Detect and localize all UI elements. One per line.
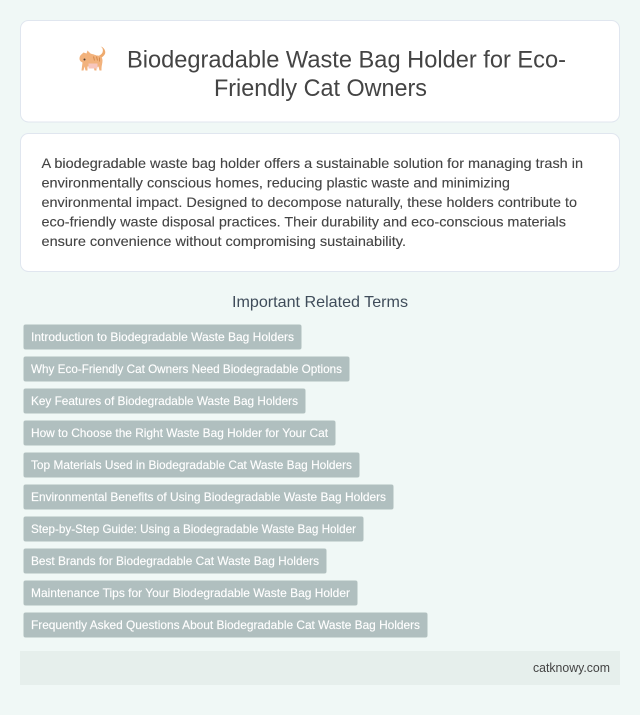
title text: Biodegradable Waste Bag Holder for Eco- <box>127 46 566 74</box>
description text: A biodegradable waste bag holder offers a sustainable solution for managing trash in <box>42 155 583 171</box>
title text <box>127 46 566 102</box>
icon: cat <box>80 46 105 70</box>
tag 1: Introduction to Biodegradable Waste Bag Holders <box>31 330 294 344</box>
tag 6 <box>24 484 394 510</box>
tag 8 <box>24 548 326 574</box>
tag 8: Best Brands for Biodegradable Cat Waste Bag Holders <box>31 554 319 568</box>
title text: Friendly Cat Owners <box>214 75 427 102</box>
tag 5 <box>24 452 360 478</box>
description text: eco-friendly waste disposal practices. Their durability and eco-conscious materials <box>42 214 566 230</box>
list: related term tags <box>24 324 428 638</box>
tag 6: Environmental Benefits of Using Biodegradable Waste Bag Holders <box>31 490 386 504</box>
description text <box>42 155 583 249</box>
tag 3 <box>24 388 306 414</box>
tag 7 <box>24 516 364 542</box>
tag 9 <box>24 580 358 606</box>
footer <box>20 651 620 685</box>
tag 1 <box>24 324 302 350</box>
heading: important related terms: Important Related Terms <box>232 294 408 311</box>
tag 10 <box>24 612 428 638</box>
tag 10: Frequently Asked Questions About Biodegradable Cat Waste Bag Holders <box>31 618 420 632</box>
description text: ensure convenience without compromising sustainability. <box>42 233 406 249</box>
tag 2: Why Eco-Friendly Cat Owners Need Biodegradable Options <box>31 362 342 376</box>
tag 7: Step-by-Step Guide: Using a Biodegradable Waste Bag Holder <box>31 522 356 536</box>
tag 9: Maintenance Tips for Your Biodegradable Waste Bag Holder <box>31 586 350 600</box>
tag 3: Key Features of Biodegradable Waste Bag Holders <box>31 394 298 408</box>
tag 5: Top Materials Used in Biodegradable Cat Waste Bag Holders <box>31 458 352 472</box>
description text: environmental impact. Designed to decompose naturally, these holders contribute to <box>42 194 577 210</box>
footer source text: catknowy.com <box>533 660 610 675</box>
tag 2 <box>24 356 350 382</box>
description text: environmentally conscious homes, reducing plastic waste and minimizing <box>42 174 510 190</box>
tag 4 <box>24 420 336 446</box>
panel: description <box>20 134 620 272</box>
panel: title card <box>20 20 620 122</box>
tag 4: How to Choose the Right Waste Bag Holder for Your Cat <box>31 426 329 440</box>
